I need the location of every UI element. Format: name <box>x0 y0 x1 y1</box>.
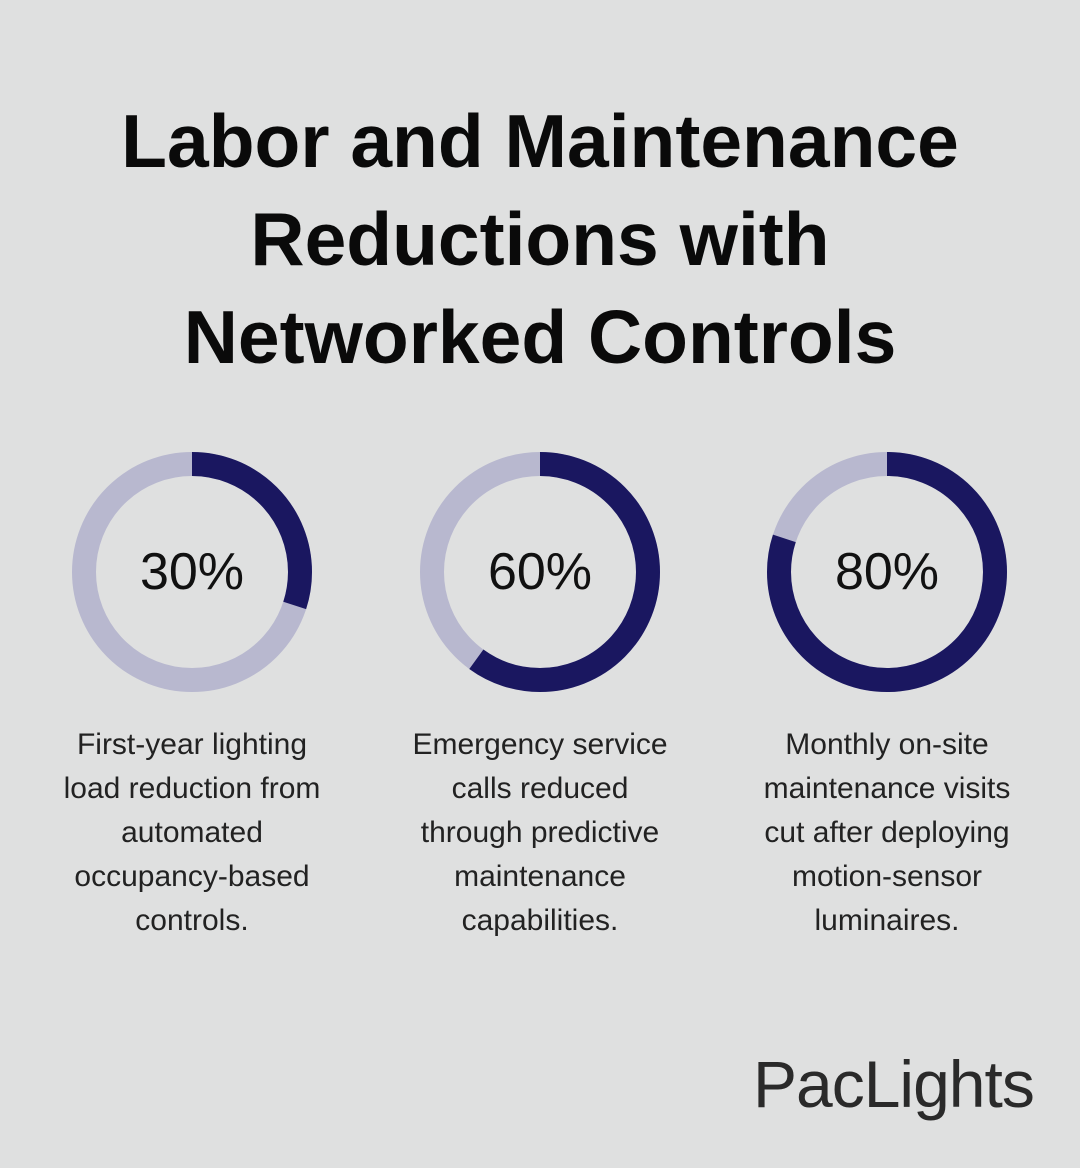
text: 80% description: cut after deploying <box>764 816 1010 849</box>
text: 60% description: maintenance <box>454 860 626 893</box>
text: 60% description <box>412 728 668 937</box>
donut: 80% <box>767 452 1007 692</box>
donut: 30% <box>72 452 312 692</box>
donut: 60% <box>420 452 660 692</box>
text: 60% description: calls reduced <box>452 772 628 805</box>
text: 30% description <box>64 728 320 937</box>
text: 60% description: capabilities. <box>462 904 618 937</box>
text: 60% description: Emergency service <box>412 728 668 761</box>
text: 30% description: automated <box>121 816 263 849</box>
title: Reductions with <box>250 197 830 281</box>
title: Networked Controls <box>184 295 896 379</box>
text: 80% description: maintenance visits <box>764 772 1010 805</box>
text: 80% description: motion-sensor <box>792 860 982 893</box>
donut: 60%: 60% <box>488 543 592 601</box>
donut: 30%: 30% <box>140 543 244 601</box>
text: 60% description: through predictive <box>421 816 659 849</box>
text: 30% description: load reduction from <box>64 772 320 805</box>
text: 30% description: controls. <box>135 904 249 937</box>
text: 30% description: occupancy-based <box>74 860 310 893</box>
donut: 80%: 80% <box>835 543 939 601</box>
text: 80% description <box>764 728 1010 937</box>
text: 30% description: First-year lighting <box>77 728 307 761</box>
text: 80% description: luminaires. <box>814 904 960 937</box>
title <box>121 99 959 379</box>
logo: PacLights <box>753 1047 1034 1121</box>
title: Labor and Maintenance <box>121 99 959 183</box>
text: 80% description: Monthly on-site <box>785 728 989 761</box>
